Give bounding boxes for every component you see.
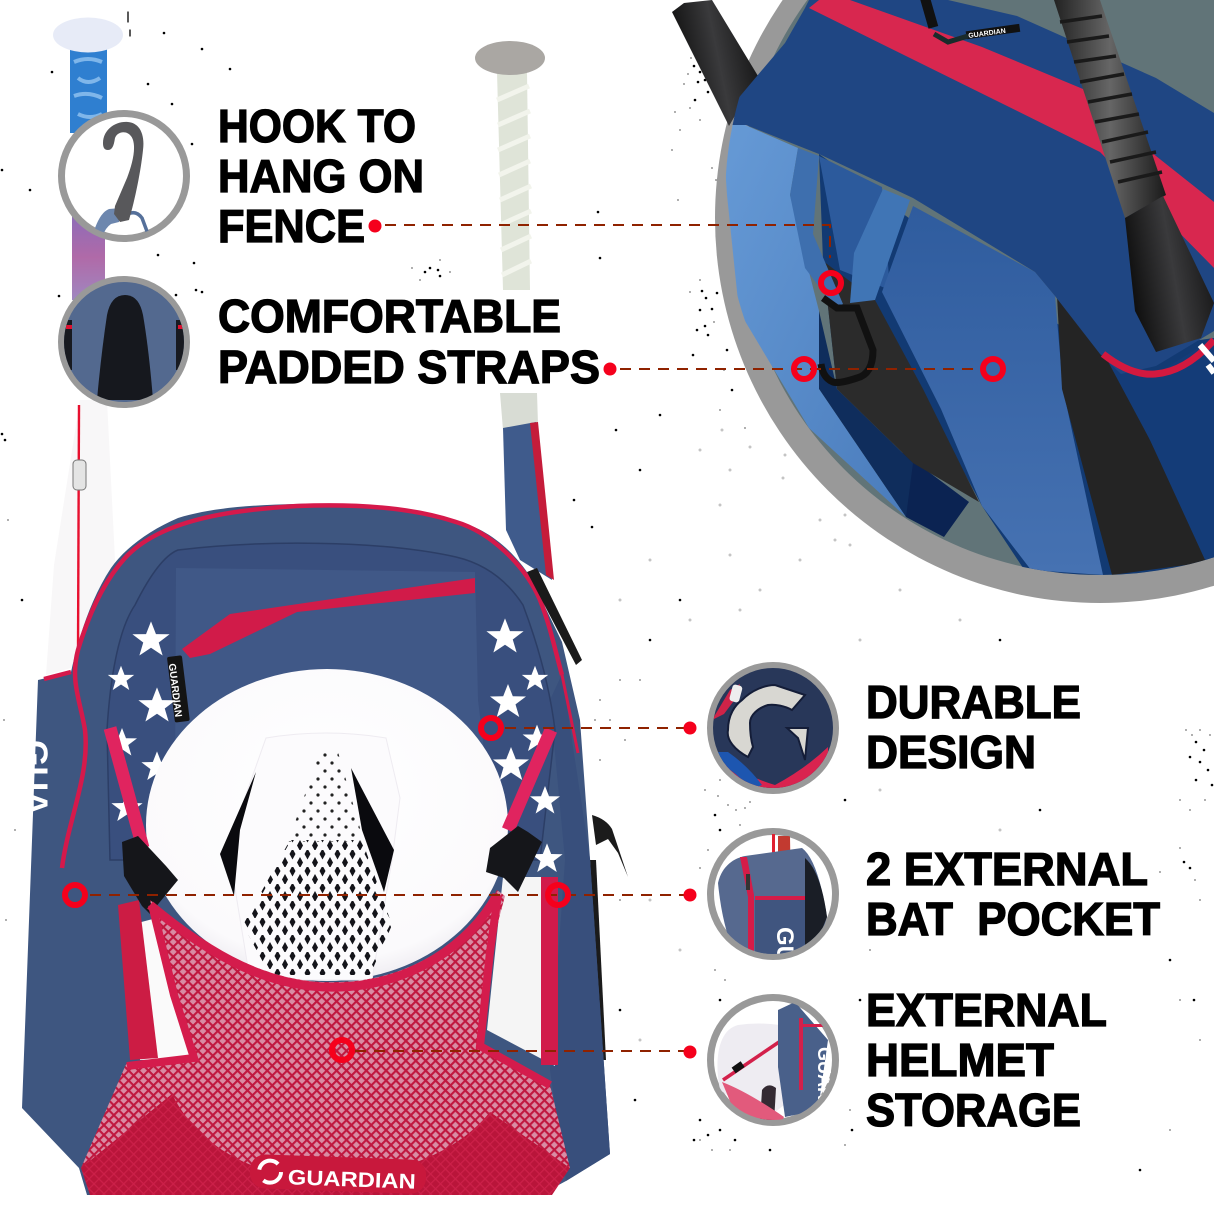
icon: bat pocket circle: GU [771,927,798,963]
leader lines [90,225,985,1051]
right side buckle strap [592,815,628,877]
right shoulder strap [882,206,1103,575]
red bottom panel [81,1094,570,1195]
icon: padded straps circle [62,280,186,404]
buckles [122,826,542,914]
icon: helmet storage circle [710,998,836,1125]
heading: durable design: DESIGN [866,726,1036,778]
heading: hook to hang on fence: FENCE [218,200,365,252]
pink straps [110,728,551,848]
heading: durable design [866,676,1081,778]
icon: durable design logo circle [710,666,836,797]
stars [107,618,563,872]
diagonal zipper [182,578,475,658]
side logo text: GUA [16,740,54,816]
white logo fragments [1200,345,1214,373]
big zoom circle: hook detail [672,0,1214,603]
left shoulder strap [722,120,906,517]
guardian logo badge [249,1154,427,1194]
heading: durable design: DURABLE [866,676,1081,728]
heading: comfortable padded straps: COMFORTABLE [218,290,561,342]
gray ring [715,0,1214,603]
inner center panel [175,568,490,800]
heading: 2 external bat pocket [866,843,1160,945]
black webbing strap [823,261,979,502]
strap loops [790,148,843,308]
black bat grip top-right [1054,0,1166,218]
dark strap loop [902,453,969,537]
baseball bat right [475,41,554,580]
pocket rim [150,895,497,987]
heading: external helmet storage [866,984,1107,1136]
heading: 2 external bat pocket: BAT POCKET [866,893,1160,945]
teal photo background [738,0,1214,575]
icon: bat pocket circle [710,832,836,963]
pocket red edge [1103,340,1214,374]
hook [821,298,873,382]
heading: external helmet storage: STORAGE [866,1084,1081,1136]
red side stripes [118,900,158,1060]
teal gap [894,444,902,453]
upper front panel [107,543,555,860]
heading: hook to hang on fence [218,100,424,252]
backpack front [16,503,628,1195]
zipper tag: GUARDIAN [968,28,1006,40]
white bat visible right of mesh [487,877,555,1066]
heading: 2 external bat pocket: 2 EXTERNAL [866,843,1148,895]
baseball bat left [46,18,123,675]
lower navy pocket [1108,362,1214,560]
heading: external helmet storage: EXTERNAL [866,984,1107,1036]
black bat top-left [672,0,758,126]
top dark blue panel [726,0,1214,374]
black mesh panel [1057,296,1208,575]
dark backing behind straps [819,154,1214,580]
mesh pocket [81,890,570,1168]
heading: hook to hang on fence: HOOK TO [218,100,416,152]
back panel dark blue [819,156,890,290]
inner navy sliver [819,311,913,517]
right zipper pull [527,568,582,665]
heading: external helmet storage: HELMET [866,1034,1054,1086]
red zipper band [809,0,1214,268]
zipper pull tag: GUARDIAN [166,663,183,718]
side shading right [550,674,610,1181]
zipper pull tag [165,655,190,723]
heading: hook to hang on fence: HANG ON [218,150,424,202]
icon: helmet storage circle: GUARDI [814,1047,834,1118]
callout markers [65,220,1003,1060]
zipper tag [920,0,1020,42]
silhouette [22,503,610,1195]
white bat visible left of mesh [130,915,196,1060]
guardian logo badge: GUARDIAN [287,1166,416,1194]
black bat barrel top-right [1125,196,1214,352]
icon: hook circle [62,114,186,238]
helmet [146,669,508,981]
heading: comfortable padded straps: PADDED STRAPS [218,341,600,393]
heading: comfortable padded straps [218,290,600,393]
outer zipper [44,505,562,868]
right dark sliver [590,860,606,1060]
